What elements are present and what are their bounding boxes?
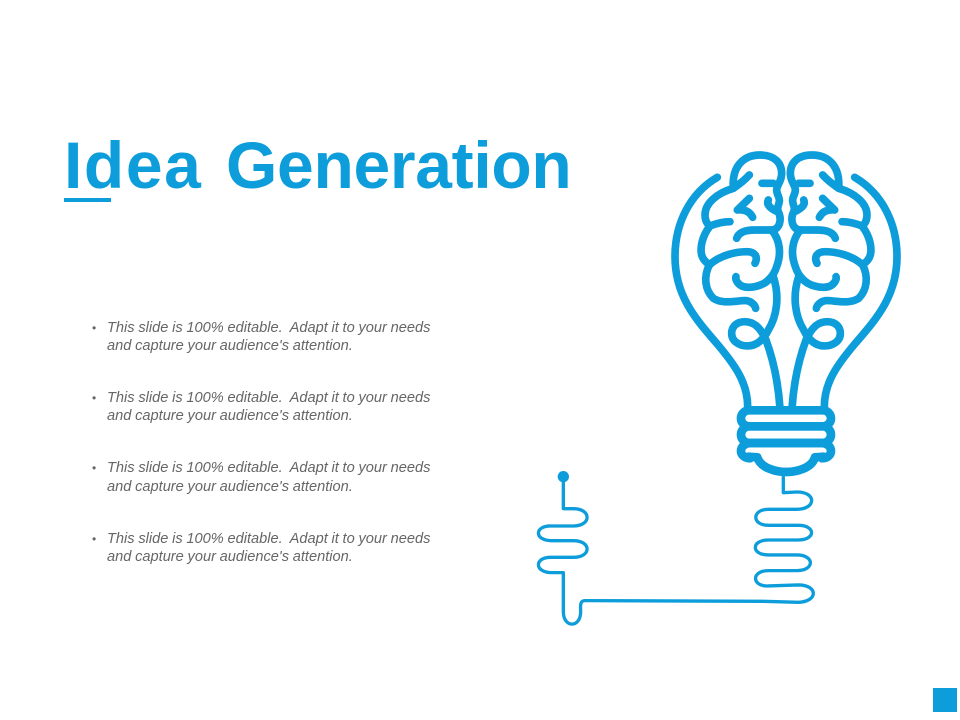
- bullet text 3: This slide is 100% editable. Adapt it to your needs and capture your audience's attention.: [107, 460, 430, 495]
- icon: light bulb with brain: [538, 155, 897, 624]
- bullet text 4: •: [92, 532, 96, 546]
- wire coil and plug: [538, 471, 813, 624]
- title: Generation: [226, 128, 571, 202]
- title: Idea: [64, 128, 202, 202]
- bullet text 2: •: [92, 391, 96, 405]
- bullet text 1: •: [92, 321, 96, 335]
- title underline: [64, 198, 111, 202]
- title: [64, 128, 571, 202]
- bullet text 2: This slide is 100% editable. Adapt it to your needs and capture your audience's attention.: [107, 390, 430, 424]
- bulb screw base: [741, 410, 831, 472]
- bullet text 3: •: [92, 461, 96, 475]
- bullet text 4: This slide is 100% editable. Adapt it to your needs and capture your audience's attention.: [107, 531, 430, 565]
- brain and bulb right half: [790, 155, 897, 408]
- bullet text 1: This slide is 100% editable. Adapt it to your needs and capture your audience's attention.: [107, 320, 430, 354]
- brain and bulb left half: [675, 155, 782, 408]
- corner square: [933, 688, 957, 712]
